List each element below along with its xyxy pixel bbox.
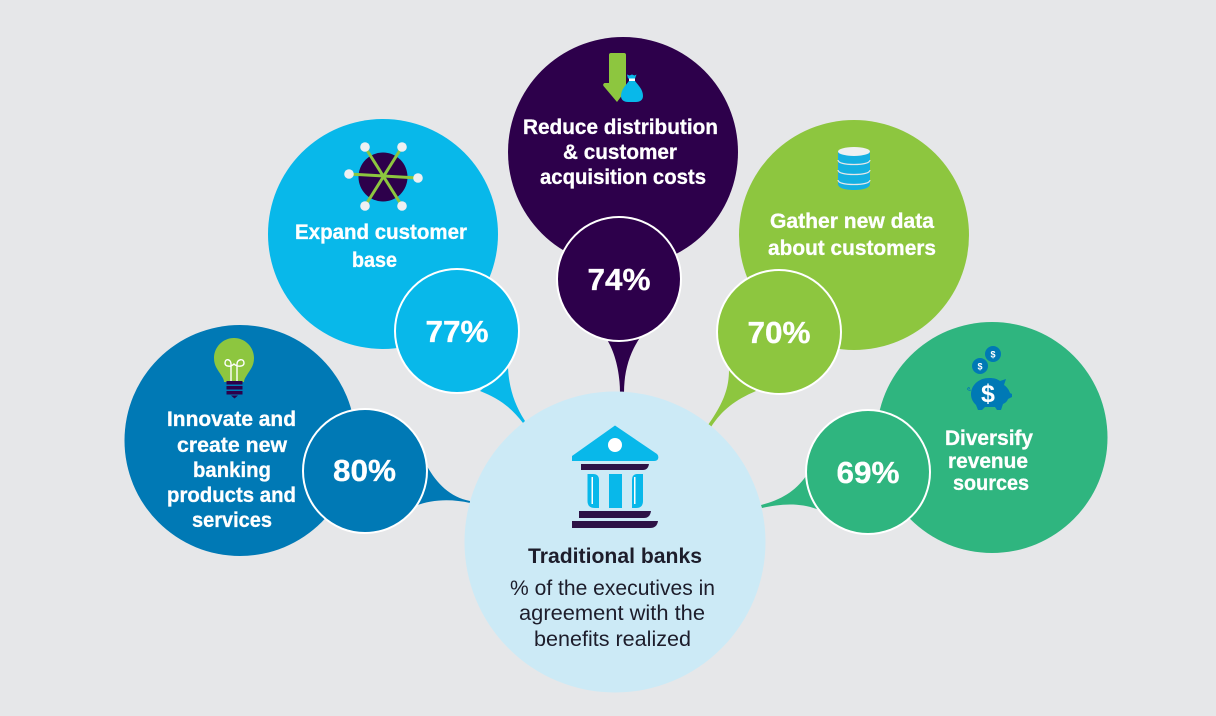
text: innovate label — [167, 408, 296, 532]
icon: piggy bank — [968, 346, 1012, 410]
badge: 80% — [303, 409, 427, 533]
text: description: % of the executives in — [510, 577, 715, 600]
text: expand label: Expand customer — [295, 221, 467, 244]
panel: traditional banks — [464, 392, 766, 692]
tail: 69% connector — [761, 476, 819, 510]
tail: 77% connector — [480, 368, 525, 423]
icon: light bulb — [214, 338, 254, 398]
icon: piggy bank: $ — [981, 380, 995, 408]
text: expand label: base — [352, 249, 397, 272]
icon: piggy bank: $ — [990, 350, 996, 360]
text: innovate label: products and — [167, 484, 296, 507]
text: innovate label: banking — [193, 459, 271, 482]
tail: 74% connector — [606, 336, 641, 393]
text: traditional banks heading: Traditional banks — [528, 545, 702, 568]
text: gather label: about customers — [768, 237, 936, 260]
badge: 77%: 77% — [426, 314, 488, 349]
badge: 74% — [557, 217, 681, 341]
text: gather label — [768, 210, 936, 260]
panel: innovate — [124, 325, 356, 556]
text: innovate label: Innovate and — [167, 408, 296, 431]
tail: 70% connector — [708, 370, 756, 427]
badge: 80%: 80% — [333, 453, 396, 488]
icon: database — [838, 147, 870, 190]
text: diversify label: sources — [953, 472, 1029, 495]
text: description — [510, 577, 715, 651]
text: innovate label: create new — [177, 434, 288, 457]
text: description: agreement with the — [519, 602, 705, 625]
panel: diversify — [876, 322, 1108, 553]
text: reduce label: acquisition costs — [540, 166, 706, 189]
badge: 74%: 74% — [588, 262, 650, 297]
badge: 70% — [717, 270, 841, 394]
text: description: benefits realized — [534, 628, 691, 651]
panel: expand — [268, 119, 498, 349]
text: reduce label: Reduce distribution — [523, 116, 718, 139]
text: diversify label — [945, 427, 1033, 495]
text: innovate label: services — [192, 509, 272, 532]
icon: network — [344, 142, 423, 211]
panel: reduce costs — [508, 37, 738, 267]
text: gather label: Gather new data — [770, 210, 934, 233]
icon: piggy bank: $ — [977, 362, 983, 372]
text: reduce label — [523, 116, 718, 189]
badge: 69% — [806, 410, 930, 534]
badge: 70%: 70% — [748, 315, 810, 350]
text: reduce label: & customer — [563, 141, 677, 164]
tail: 80% connector — [415, 466, 470, 506]
icon: arrow and money bag — [603, 53, 643, 102]
panel: gather data — [739, 120, 969, 350]
text: diversify label: Diversify — [945, 427, 1033, 450]
icon: bank building — [572, 426, 658, 528]
badge: 69%: 69% — [836, 455, 900, 490]
text: diversify label: revenue — [948, 450, 1028, 473]
text: expand label — [295, 221, 467, 272]
badge: 77% — [395, 269, 519, 393]
